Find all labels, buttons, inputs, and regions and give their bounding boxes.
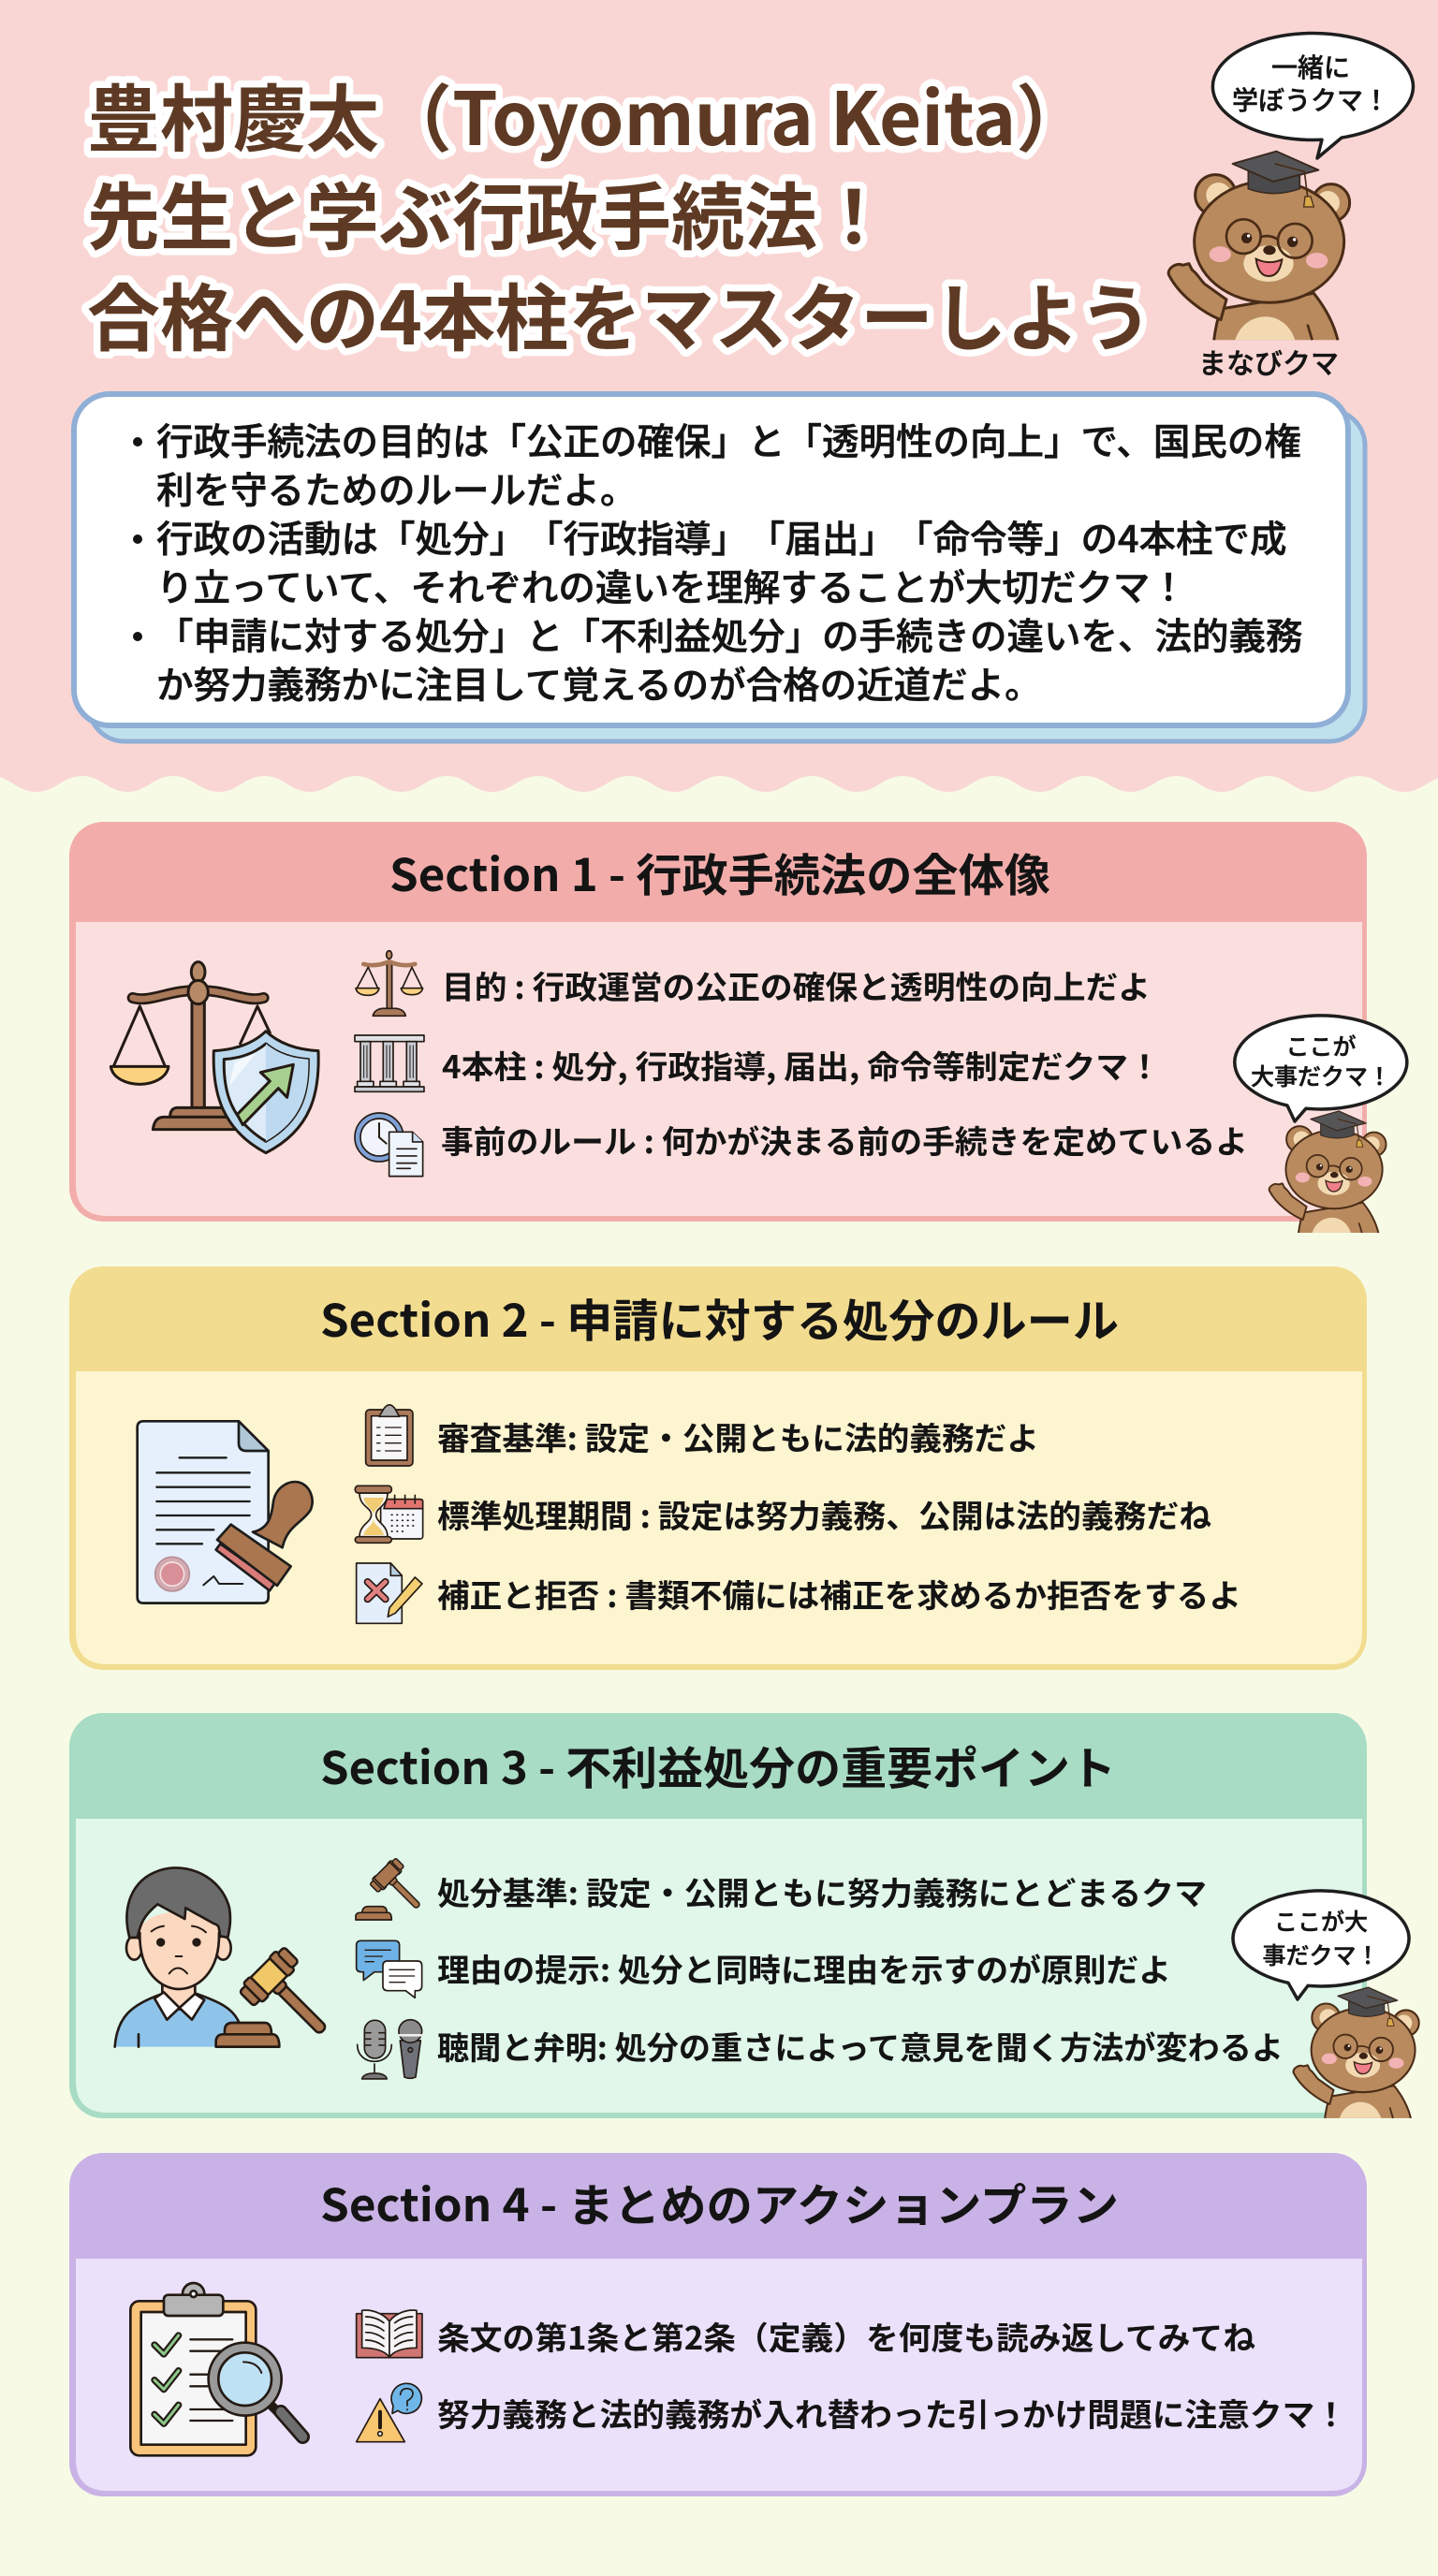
icon: chat bubbles: [357, 1940, 422, 1998]
heading: Section 3 - 不利益処分の重要ポイント: [320, 1732, 1116, 1797]
icon: rejected document and pencil: [357, 1563, 422, 1623]
summary text: 「命令等」の4本柱で成: [896, 510, 1287, 564]
callout: bear and bubble: [1235, 1016, 1407, 1233]
row text: 努力義務と法的義務が入れ替わった引っかけ問題に注意クマ！: [437, 2390, 1347, 2436]
row text: 理由の提示: 処分と同時に理由を示すのが原則だよ: [437, 1945, 1171, 1991]
mascot name: まなびクマ: [1198, 341, 1339, 382]
summary text: 利を守るためのルールだよ。: [156, 461, 637, 515]
speech bubble: [1212, 33, 1413, 158]
summary text: 「行政指導」: [526, 510, 748, 564]
icon: document with stamp: [138, 1421, 313, 1603]
panel: section 4: [69, 2153, 1367, 2496]
title: 豊村慶太（Toyomura Keita）: [87, 62, 1089, 167]
summary text: 行政の活動は「処分」: [156, 510, 526, 564]
summary text: 「申請に対する処分」と「不利益処分」の手続きの違いを、法的義務: [156, 607, 1303, 661]
callout: bear and bubble: ここが大: [1274, 1904, 1368, 1938]
header pink band with scalloped edge: [0, 0, 1438, 792]
callout: bear and bubble: 大事だクマ！: [1251, 1059, 1391, 1092]
title: 合格への4本柱をマスターしよう: [87, 261, 1152, 366]
icon: microphones: [358, 2020, 422, 2079]
bear: [1168, 152, 1350, 340]
icon: gavel: [356, 1857, 432, 1920]
callout: bear and bubble: 事だクマ！: [1262, 1938, 1380, 1971]
icon: pillars: [355, 1035, 424, 1091]
row text: 標準処理期間 : 設定は努力義務、公開は法的義務だね: [437, 1491, 1211, 1537]
panel: section 3: [69, 1713, 1419, 2118]
speech bubble: 一緒に: [1271, 48, 1350, 85]
row text: 4本柱 : 処分, 行政指導, 届出, 命令等制定だクマ！: [442, 1042, 1161, 1088]
title: [87, 62, 1152, 366]
row text: 聴聞と弁明: 処分の重さによって意見を聞く方法が変わるよ: [437, 2023, 1284, 2069]
mascot: まなびクマ with speech bubble: [1168, 33, 1413, 382]
summary box: [74, 394, 1365, 741]
heading: Section 4 - まとめのアクションプラン: [320, 2169, 1119, 2234]
icon: checklist with magnifier: [130, 2283, 302, 2455]
callout: bear and bubble: ここが: [1285, 1029, 1357, 1062]
row text: 条文の第1条と第2条（定義）を何度も読み返してみてね: [437, 2313, 1255, 2359]
row text: 補正と拒否 : 書類不備には補正を求めるか拒否をするよ: [437, 1571, 1241, 1617]
row text: 目的 : 行政運営の公正の確保と透明性の向上だよ: [442, 962, 1151, 1008]
icon: clock and document: [355, 1113, 423, 1177]
row text: 処分基準: 設定・公開ともに努力義務にとどまるクマ: [437, 1868, 1207, 1914]
icon: hourglass and calendar: [355, 1486, 423, 1543]
summary text: か努力義務かに注目して覚えるのが合格の近道だよ。: [156, 656, 1042, 710]
heading: Section 1 - 行政手続法の全体像: [389, 839, 1050, 904]
panel: section 1: [69, 822, 1407, 1233]
heading: Section 2 - 申請に対する処分のルール: [320, 1284, 1119, 1350]
summary text: り立っていて、それぞれの違いを理解することが大切だクマ！: [156, 559, 1187, 612]
title: 先生と学ぶ行政手続法！: [87, 160, 890, 265]
icon: scales and shield: [110, 962, 318, 1153]
icon: open book: [357, 2310, 422, 2358]
row text: 事前のルール : 何かが決まる前の手続きを定めているよ: [441, 1117, 1248, 1163]
icon: clipboard: [366, 1405, 413, 1466]
summary text: 行政手続法の目的は「公正の確保」と「透明性の向上」で、国民の権: [156, 413, 1301, 466]
icon: worried person with gavel: [115, 1867, 345, 2053]
icon: small scales: [356, 951, 423, 1016]
callout: bear and bubble: [1233, 1891, 1419, 2118]
panel: section 2: [69, 1266, 1367, 1670]
icon: warning and question: [357, 2383, 421, 2442]
summary text: [133, 413, 1303, 710]
row text: 審査基準: 設定・公開ともに法的義務だよ: [437, 1413, 1039, 1459]
summary text: 「届出」: [748, 510, 896, 564]
speech bubble: 学ぼうクマ！: [1232, 80, 1389, 118]
